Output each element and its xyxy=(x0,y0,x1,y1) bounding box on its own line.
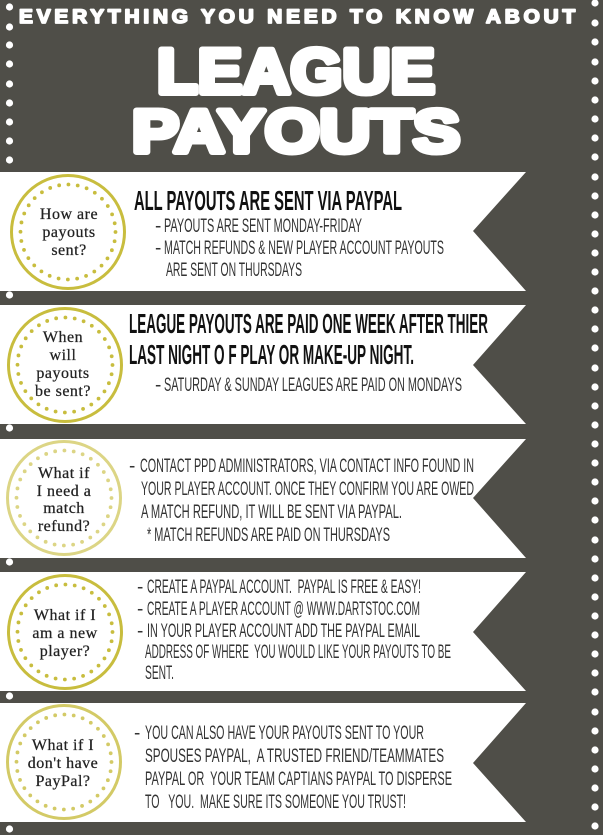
text: refund instructions: * MATCH REFUNDS ARE PAID ON THURSDAYS xyxy=(147,525,390,546)
badge: new player: am a new xyxy=(32,625,98,642)
text: payout details: - xyxy=(155,216,161,237)
badge: no paypal xyxy=(8,706,120,818)
badge: no paypal: PayPal? xyxy=(35,773,91,790)
panel: no paypal xyxy=(0,703,526,822)
text: new player steps: - xyxy=(137,599,143,620)
title: league: LEAGUE xyxy=(157,37,435,107)
badge: when will payouts be sent: will xyxy=(50,347,76,364)
badge: when will payouts be sent xyxy=(8,308,122,422)
panel: how are payouts sent xyxy=(0,172,526,291)
badge: match refund: match xyxy=(43,500,85,517)
badge: when will payouts be sent: be sent? xyxy=(35,383,91,400)
text: paypal alternatives: TO YOU. MAKE SURE ITS SOMEONE YOU TRUST! xyxy=(145,792,406,813)
text: refund instructions: A MATCH REFUND, IT WILL BE SENT VIA PAYPAL. xyxy=(141,502,402,523)
text: new player steps: SENT. xyxy=(145,663,174,684)
text: weekend leagues: - xyxy=(155,375,161,396)
badge: no paypal: What if I xyxy=(32,737,94,754)
text: payout details: PAYOUTS ARE SENT MONDAY-FRIDAY xyxy=(164,216,362,237)
badge: match refund: refund? xyxy=(38,518,90,535)
badge: new player: What if I xyxy=(34,607,96,624)
panel: match refund xyxy=(0,439,526,558)
heading: league payouts timing xyxy=(129,308,488,370)
text: refund instructions xyxy=(129,456,474,546)
text: payout details xyxy=(155,216,444,281)
title: everything you need to know about: EVERYTHING YOU NEED TO KNOW ABOUT xyxy=(19,7,579,28)
text: weekend leagues xyxy=(155,375,462,396)
badge: how are payouts sent: payouts xyxy=(42,224,96,241)
title: payouts: PAYOUTS xyxy=(132,98,460,165)
panel: new player xyxy=(0,572,526,691)
panel: when will payouts be sent xyxy=(0,305,526,424)
text: paypal alternatives xyxy=(134,723,452,813)
text: paypal alternatives: - xyxy=(134,723,140,744)
text: payout details: ARE SENT ON THURSDAYS xyxy=(166,260,302,281)
badge: no paypal: don't have xyxy=(28,755,98,772)
badge: when will payouts be sent: payouts xyxy=(36,365,90,382)
text: refund instructions: - xyxy=(129,456,135,477)
badge: match refund xyxy=(8,442,120,554)
badge: match refund: I need a xyxy=(37,483,91,500)
badge: match refund: What if xyxy=(38,465,90,482)
badge: how are payouts sent: sent? xyxy=(51,242,87,259)
text: new player steps xyxy=(137,577,451,684)
badge: new player: player? xyxy=(40,643,90,660)
text: payout details: - xyxy=(155,238,161,259)
dotted border: left xyxy=(6,3,13,833)
text: new player steps: - xyxy=(137,621,143,642)
badge: how are payouts sent: How are xyxy=(40,206,98,223)
badge: when will payouts be sent: When xyxy=(43,329,83,346)
badge: how are payouts sent xyxy=(12,176,124,288)
text: new player steps: - xyxy=(137,577,143,598)
badge: new player xyxy=(8,576,122,688)
dotted border: right xyxy=(591,0,599,830)
